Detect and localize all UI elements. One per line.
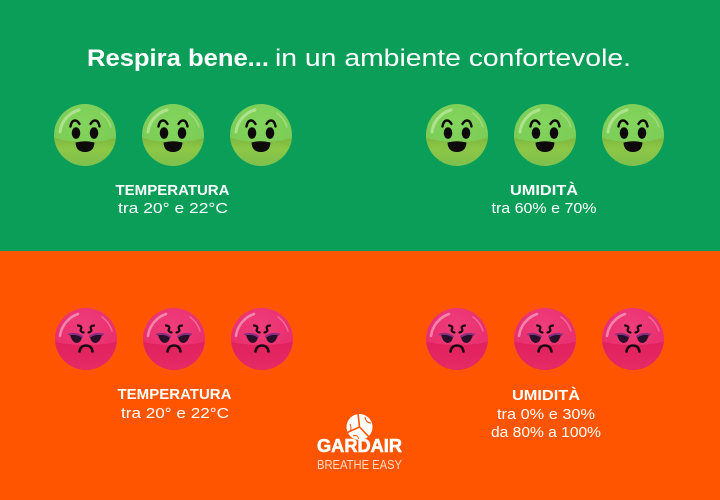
logo: Gardair [317, 413, 403, 472]
text: good humidity [492, 182, 597, 217]
text: bad humidity: UMIDITÀ [512, 387, 581, 404]
logo tagline: BREATHE EASY [317, 458, 403, 472]
text: bad temperature [118, 387, 232, 422]
icon: fan [346, 413, 372, 440]
text: good temperature [116, 183, 230, 217]
text: good humidity: UMIDITÀ [510, 182, 579, 199]
icons: sad faces, humidity [426, 308, 664, 370]
text: bad temperature: TEMPERATURA [118, 387, 232, 403]
icons: happy faces, humidity [426, 104, 664, 166]
text: bad humidity: da 80% a 100% [491, 425, 601, 441]
text: bad humidity [491, 387, 601, 441]
logo wordmark: GARDAIR [317, 436, 402, 456]
text: bad temperature: tra 20° e 22°C [121, 406, 229, 422]
panel: uncomfortable conditions (orange) [0, 251, 720, 500]
text: good temperature: tra 20° e 22°C [118, 201, 228, 217]
text: good humidity: tra 60% e 70% [492, 201, 597, 217]
icons: happy faces, temperature [54, 104, 292, 166]
panel: comfortable conditions (green) [0, 0, 720, 251]
title: in un ambiente confortevole. [275, 45, 631, 72]
text: good temperature: TEMPERATURA [116, 183, 230, 199]
icons: sad faces, temperature [55, 308, 293, 370]
title: Respira bene... [87, 45, 269, 72]
text: bad humidity: tra 0% e 30% [497, 407, 595, 423]
